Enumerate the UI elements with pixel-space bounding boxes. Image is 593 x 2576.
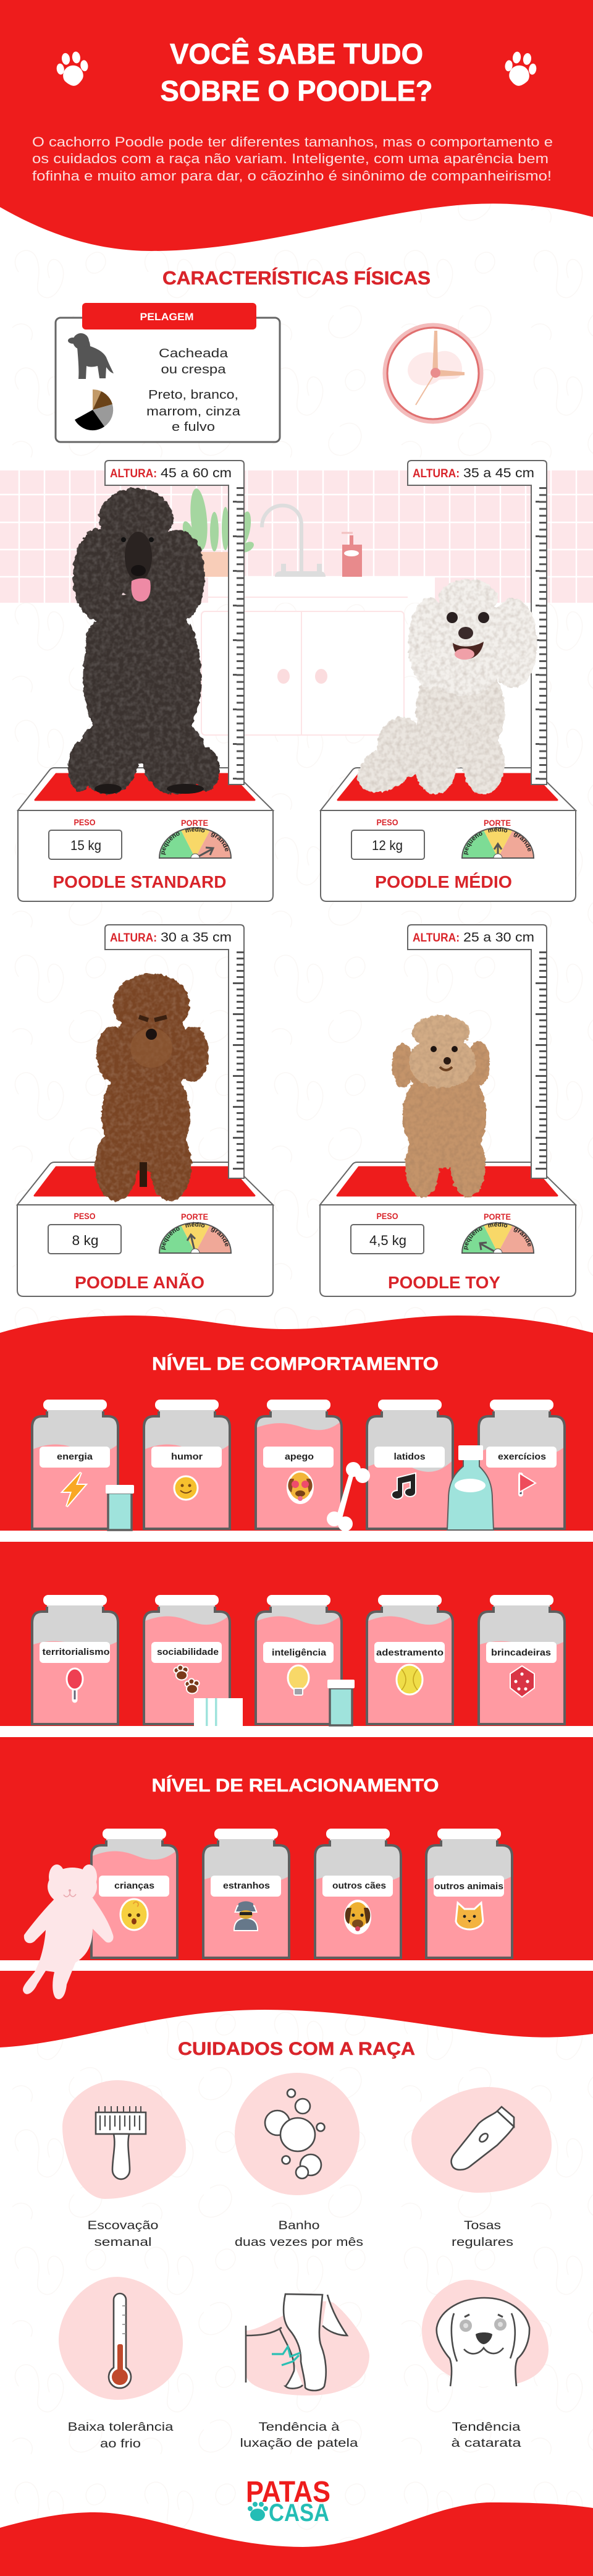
jar: sociabilidade (144, 1595, 230, 1724)
weight box: 4,5 kg (369, 1233, 406, 1248)
size gauge: pequeno (463, 832, 482, 855)
icon: detective (235, 1902, 257, 1930)
icon: flag (520, 1474, 534, 1494)
coat type text: ou crespa (161, 363, 227, 376)
footer red wave (0, 2502, 593, 2576)
weight box (49, 830, 122, 859)
jar: adestramento: adestramento (376, 1647, 444, 1658)
coat colours text: Preto, branco, (148, 388, 238, 402)
caption (240, 2421, 358, 2450)
small cyan jar (106, 1485, 134, 1530)
coat type text: Cacheada (159, 347, 229, 360)
caption (235, 2219, 363, 2249)
height label: 35 a 45 cm (463, 466, 534, 480)
jar: outros cães (315, 1829, 401, 1958)
jar: outros cães: outros cães (332, 1881, 386, 1891)
shelf 1 (0, 1531, 593, 1542)
height label: ALTURA: (413, 932, 460, 945)
care: frio (59, 2277, 183, 2451)
icon: tennis ball (397, 1665, 423, 1694)
jar: outros animais: outros animais (434, 1881, 503, 1892)
panel: red behaviour section (0, 1316, 593, 2047)
shelf 3 (0, 1960, 593, 1971)
weight box: 8 kg (72, 1233, 99, 1248)
jar: brincadeiras: brincadeiras (491, 1647, 551, 1658)
logo: patas da casa: PATAS (246, 2476, 330, 2509)
photo: brown poodle (95, 974, 209, 1201)
pelagem tab (82, 303, 256, 329)
jar: apego (256, 1400, 342, 1529)
weight label: PESO (377, 1211, 398, 1221)
panel: pelagem (56, 303, 280, 442)
intro paragraph (32, 134, 553, 184)
panel: poodle anão (16, 924, 274, 1297)
jar: energia (32, 1400, 118, 1529)
icon: thermometer (109, 2293, 131, 2388)
caption: Banho (278, 2219, 320, 2232)
size gauge: grande (211, 1228, 229, 1246)
blob (246, 2302, 369, 2395)
weight label: PESO (377, 817, 398, 827)
blob (411, 2087, 552, 2193)
caption: Tendência (452, 2421, 521, 2434)
jar: exercícios (479, 1400, 565, 1529)
caption: à catarata (451, 2437, 521, 2450)
icon: dice (511, 1667, 534, 1696)
height label (110, 466, 232, 480)
panel: poodle toy (319, 924, 577, 1297)
photo: apricot poodle (392, 1015, 490, 1197)
heading: nível de relacionamento: NÍVEL DE RELACIONAMENTO (152, 1775, 439, 1796)
blob (62, 2080, 186, 2199)
size gauge (159, 1222, 232, 1254)
plant (180, 488, 256, 577)
small cyan jar (327, 1680, 355, 1725)
icon: wall clock (385, 326, 481, 421)
panel: poodle médio (319, 460, 577, 902)
faucet (262, 506, 326, 577)
icon: right paw (502, 50, 539, 88)
jar: territorialismo (32, 1595, 118, 1724)
size gauge: pequeno (161, 1227, 180, 1250)
weight box (351, 830, 424, 859)
bone (327, 1462, 370, 1531)
size gauge (159, 827, 232, 859)
icon: lightning (63, 1473, 85, 1507)
caption: Tosas (464, 2219, 501, 2232)
icon: cat face (456, 1903, 483, 1929)
poodle name: POODLE MÉDIO (375, 872, 512, 891)
scale base (321, 768, 576, 901)
icon: dog in love (287, 1471, 314, 1504)
size gauge: médio (488, 827, 508, 833)
icon: pin (67, 1668, 83, 1700)
title: VOCÊ SABE TUDO (170, 38, 423, 70)
caption: luxação de patela (240, 2437, 358, 2450)
jar: exercícios: exercícios (498, 1452, 546, 1462)
size gauge: médio (185, 1222, 205, 1228)
panel: header (0, 0, 593, 251)
height label (110, 930, 232, 945)
poodle name: POODLE TOY (388, 1273, 500, 1292)
caption: regulares (452, 2236, 513, 2249)
caption (88, 2219, 158, 2249)
size gauge: pequeno (463, 1227, 482, 1250)
jar: brincadeiras (479, 1595, 565, 1724)
jar: estranhos (203, 1829, 289, 1958)
scale base (17, 1162, 273, 1296)
intro paragraph: os cuidados com a raça não variam. Inteligente, com uma aparência bem (32, 151, 549, 166)
height label (413, 466, 534, 480)
height label: 25 a 30 cm (463, 930, 534, 945)
icon: bubbles (265, 2089, 325, 2179)
jar: outros animais (426, 1829, 512, 1958)
weight box: 15 kg (70, 838, 101, 853)
blob (235, 2073, 360, 2195)
icon: dog face (344, 1900, 371, 1934)
size gauge: pequeno (161, 832, 180, 855)
height ruler (105, 461, 244, 784)
heading: nível de comportamento: NÍVEL DE COMPORTAMENTO (152, 1353, 439, 1374)
caption (452, 2219, 513, 2249)
jar: apego: apego (285, 1452, 314, 1462)
teddy bear (23, 1864, 114, 1999)
icon: dog silhouette (68, 333, 114, 379)
icon: logo paw (248, 2502, 268, 2521)
size gauge: grande (513, 832, 531, 852)
jar: territorialismo: territorialismo (42, 1647, 109, 1657)
jar: sociabilidade: sociabilidade (157, 1647, 219, 1657)
bathroom background illustration (0, 470, 593, 735)
size label: PORTE (484, 818, 511, 828)
poodle name: POODLE STANDARD (53, 872, 226, 891)
icon: music note (392, 1474, 415, 1498)
height label (413, 930, 534, 945)
intro paragraph: O cachorro Poodle pode ter diferentes tamanhos, mas o comportamento e (32, 134, 553, 150)
caption (451, 2421, 521, 2450)
photo: black poodle (68, 488, 219, 794)
caption: Baixa tolerância (68, 2421, 174, 2434)
weight box (351, 1225, 424, 1254)
height label: 45 a 60 cm (161, 466, 232, 480)
size gauge: grande (211, 832, 229, 852)
scale base (320, 1162, 576, 1296)
cyan bottle (447, 1445, 494, 1530)
jar: humor (144, 1400, 230, 1529)
size gauge: grande (513, 1228, 531, 1246)
icon: left paw (54, 50, 91, 88)
weight label: PESO (74, 1211, 96, 1221)
pelagem tab: PELAGEM (140, 311, 194, 323)
icon: light bulb (288, 1665, 309, 1695)
blob (422, 2280, 549, 2386)
caption: Escovação (88, 2219, 158, 2232)
coat type text (159, 347, 229, 376)
cotton box (194, 1698, 243, 1727)
icon: smile (174, 1476, 198, 1500)
title: SOBRE O POODLE? (161, 75, 432, 107)
jar: adestramento (367, 1595, 453, 1724)
weight box: 12 kg (372, 838, 403, 853)
care: patela (240, 2294, 369, 2450)
height label: ALTURA: (413, 467, 460, 480)
icon: clipper (452, 2107, 514, 2170)
blob (59, 2277, 183, 2400)
icon: dog leg (246, 2294, 347, 2391)
caption: semanal (94, 2236, 152, 2249)
care: banho (235, 2073, 363, 2249)
jar: latidos: latidos (394, 1452, 425, 1462)
jar: estranhos: estranhos (223, 1881, 270, 1891)
jar: latidos (367, 1400, 453, 1529)
heading: cuidados com a raça: CUIDADOS COM A RAÇA (178, 2039, 415, 2059)
shelf 2 (0, 1726, 593, 1737)
size gauge (461, 827, 534, 859)
soap bottle (342, 533, 362, 577)
height label: ALTURA: (110, 467, 157, 480)
logo: patas da casa (246, 2476, 330, 2527)
weight box (48, 1225, 121, 1254)
size label: PORTE (181, 1212, 208, 1222)
jar: inteligência (256, 1595, 342, 1724)
poodle name: POODLE ANÃO (75, 1273, 204, 1292)
panel: poodle standard (17, 460, 274, 902)
scale base (18, 768, 273, 901)
coat colours text: e fulvo (172, 420, 215, 434)
care: escovação (62, 2080, 186, 2249)
icon: baby (120, 1899, 148, 1930)
coat colours text (146, 388, 241, 434)
icon: brush (96, 2106, 146, 2179)
size label: PORTE (181, 818, 208, 828)
title (161, 38, 432, 107)
height label: 30 a 35 cm (161, 930, 232, 945)
icon: dog face (437, 2298, 529, 2386)
photo: white poodle (349, 579, 537, 802)
height label: ALTURA: (110, 932, 157, 945)
jar: humor: humor (171, 1452, 203, 1462)
header red wave (0, 0, 593, 251)
size gauge: médio (185, 827, 205, 833)
heading: características físicas: CARACTERÍSTICAS FÍSICAS (162, 267, 431, 289)
care: tosas (411, 2087, 552, 2249)
caption: Tendência à (258, 2421, 340, 2434)
jar: crianças (91, 1829, 177, 1958)
intro paragraph: fofinha e muito amor para dar, o cãozinho é sinônimo de companheirismo! (32, 168, 552, 184)
size gauge (461, 1222, 534, 1254)
height ruler (408, 925, 547, 1178)
weight label: PESO (74, 817, 96, 827)
coat colours text: marrom, cinza (146, 405, 241, 419)
icon: colour pie (75, 389, 113, 430)
size label: PORTE (484, 1212, 511, 1222)
caption (68, 2421, 174, 2451)
care: catarata (422, 2280, 549, 2450)
caption: duas vezes por mês (235, 2236, 363, 2249)
height ruler (105, 925, 244, 1178)
icon: two paws (174, 1665, 199, 1693)
height ruler (408, 461, 547, 784)
logo: patas da casa: CASA (269, 2499, 329, 2527)
size gauge: médio (488, 1222, 508, 1228)
jar: crianças: crianças (114, 1881, 154, 1891)
caption: ao frio (100, 2438, 141, 2451)
jar: inteligência: inteligência (272, 1647, 327, 1658)
jar: energia: energia (57, 1452, 93, 1462)
